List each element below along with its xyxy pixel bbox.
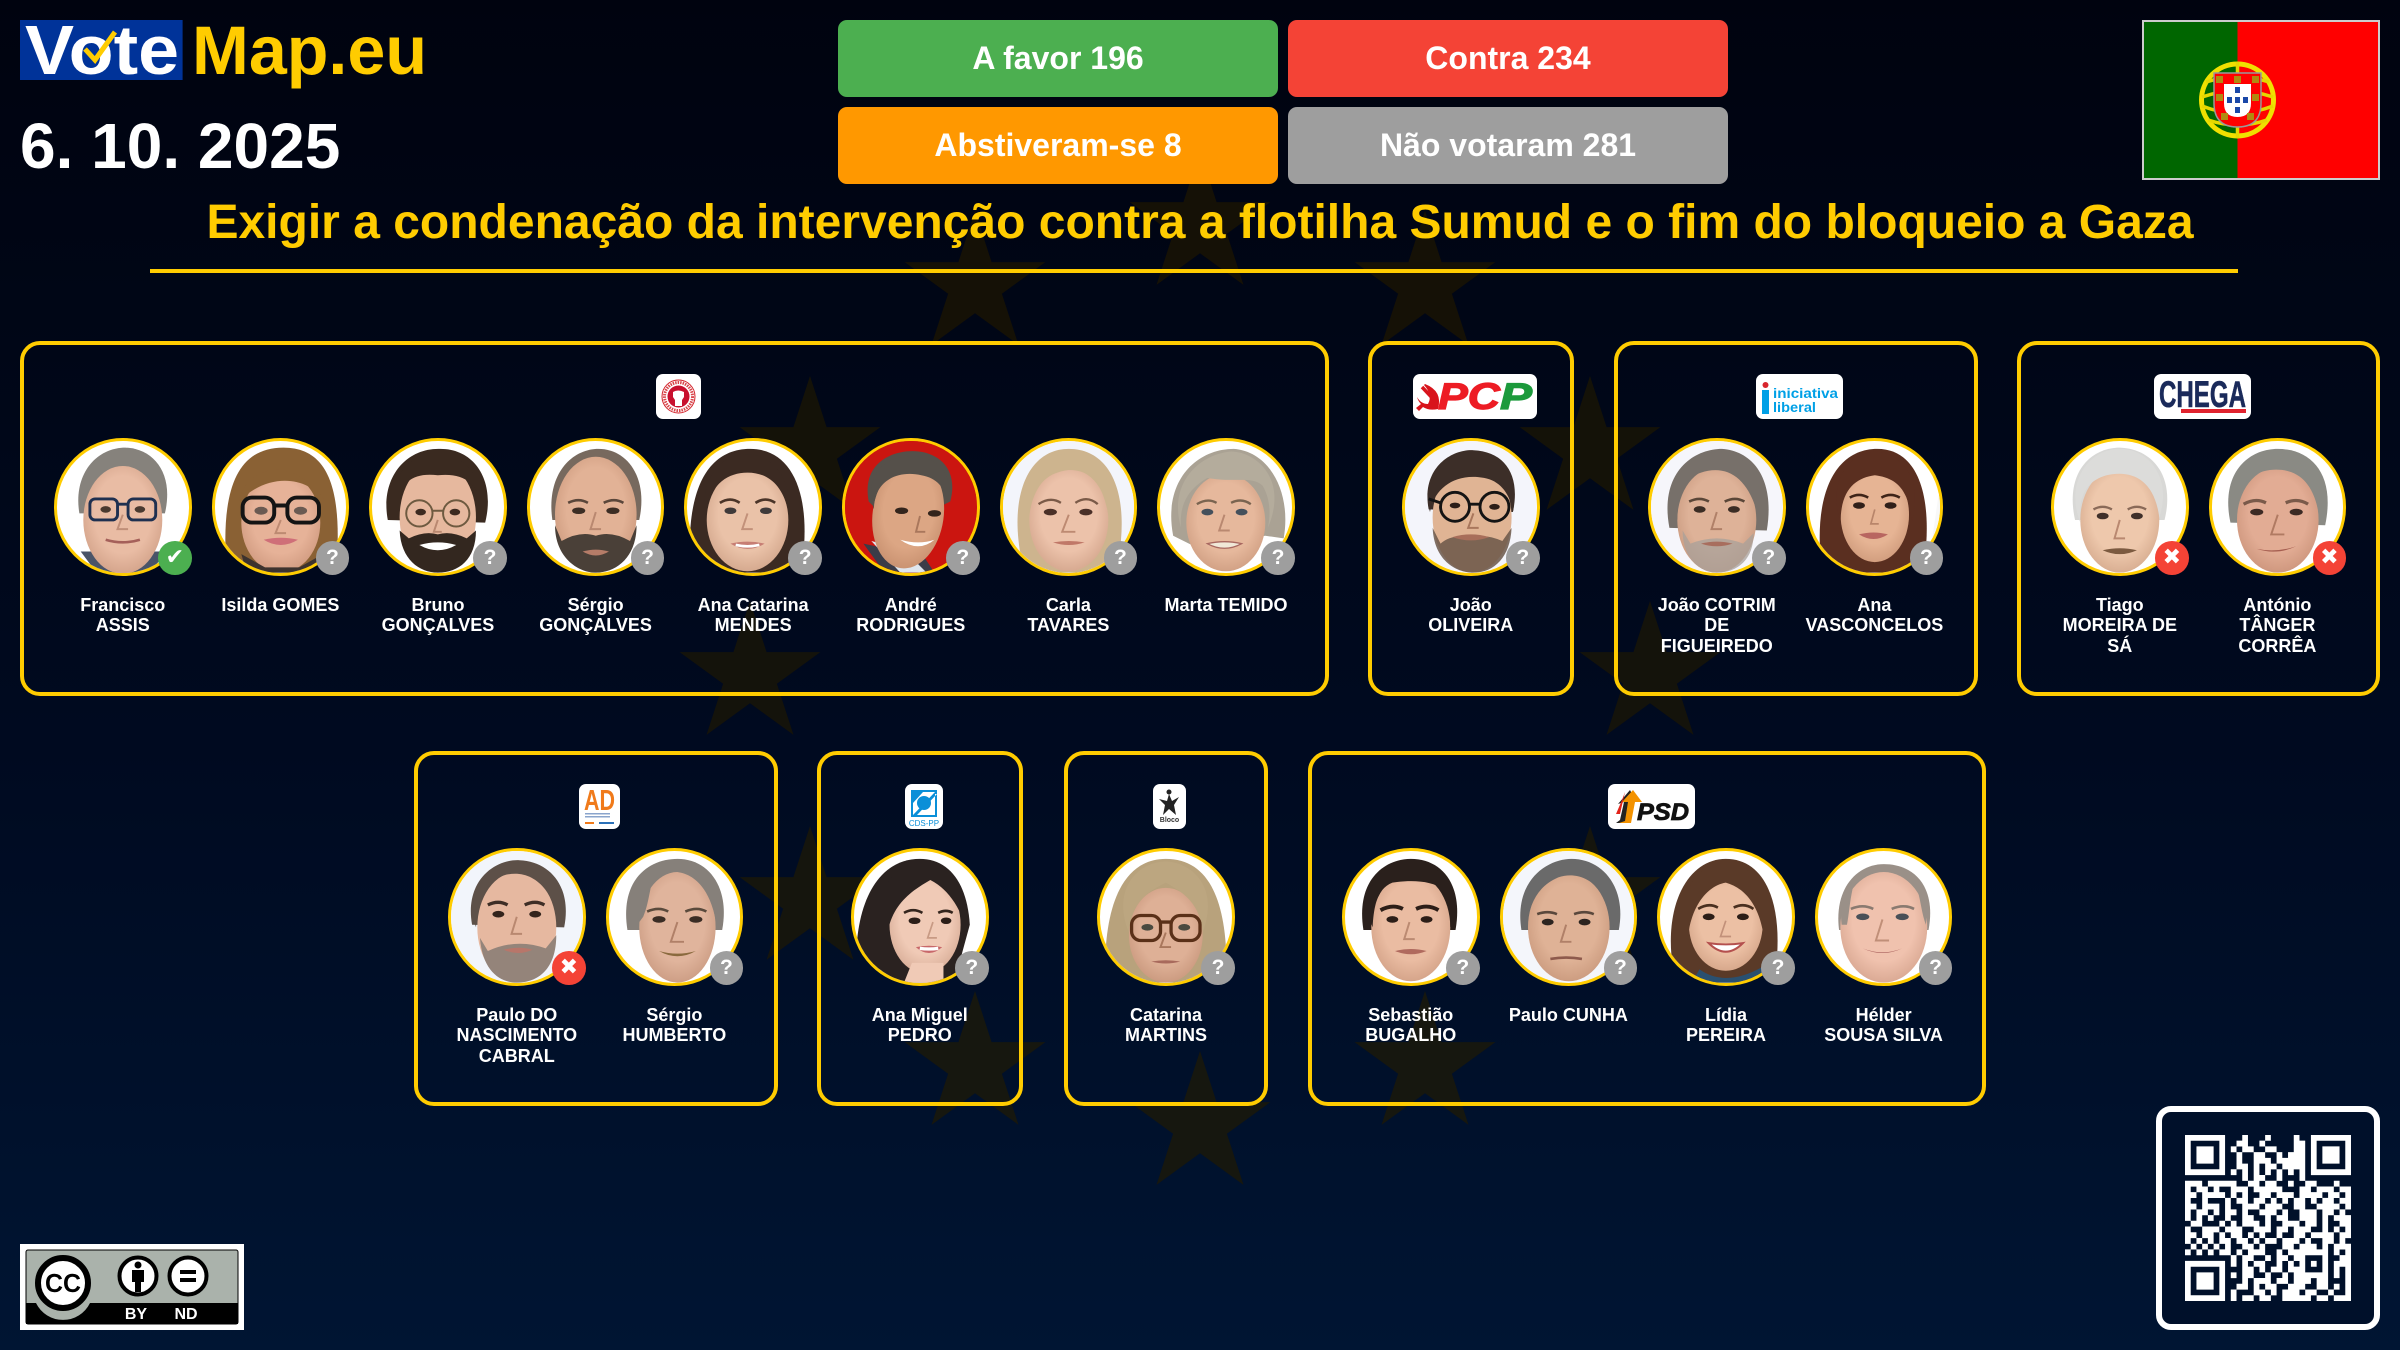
name: BUGALHO (1365, 1025, 1456, 1045)
name: MENDES (715, 615, 792, 635)
name: HUMBERTO (623, 1025, 726, 1045)
vote badge (1761, 951, 1795, 985)
name: GONÇALVES (539, 615, 652, 635)
panel: CDS-PP (817, 751, 1023, 1106)
name: Lídia (1705, 1004, 1747, 1024)
vote count: against: Contra 234 (1425, 40, 1591, 76)
vote badge: ? (720, 956, 733, 979)
party logo: Iniciativa Liberal (1756, 374, 1843, 419)
vote badge: ✖ (2163, 545, 2181, 570)
name: Ana (1857, 594, 1891, 614)
vote badge: ? (1772, 956, 1784, 979)
name (1027, 594, 1109, 635)
name: SÁ (2107, 636, 2132, 656)
portrait (54, 438, 192, 576)
card: Hélder Sousa Silva (1815, 848, 1952, 1045)
party logo: Iniciativa Liberal: iniciativa (1773, 385, 1838, 401)
name: Catarina (1130, 1004, 1202, 1024)
name: OLIVEIRA (1428, 615, 1513, 635)
card: João Oliveira (1402, 438, 1540, 635)
name (1125, 1004, 1207, 1045)
name (698, 594, 809, 635)
vote badge: ? (956, 546, 969, 569)
party logo: PS (656, 374, 701, 419)
license badge: CC BY-ND: CC (45, 1268, 81, 1298)
name: SOUSA SILVA (1824, 1025, 1943, 1045)
portrait (1342, 848, 1480, 986)
party logo: Iniciativa Liberal: liberal (1773, 399, 1816, 415)
name (1806, 594, 1943, 635)
card: Ana Catarina Mendes (684, 438, 822, 635)
vote badge: ? (1929, 956, 1942, 979)
name: CORRÊA (2238, 636, 2316, 656)
name: André (885, 594, 937, 614)
name: Sérgio (646, 1004, 702, 1024)
vote badge (316, 541, 349, 575)
name: DE (1704, 615, 1729, 635)
card: Paulo Cunha (1500, 848, 1637, 1024)
name: PEDRO (888, 1025, 952, 1045)
name (872, 1004, 968, 1045)
name (1658, 594, 1776, 656)
vote badge: ✖ (560, 955, 578, 980)
vote badge: ? (1516, 546, 1529, 569)
portrait (2209, 438, 2346, 576)
vote badge: ? (1456, 956, 1469, 979)
card: Catarina Martins (1097, 848, 1235, 1045)
name: Bruno (411, 594, 464, 614)
name (382, 594, 494, 635)
vote badge (2313, 541, 2346, 575)
vote count: in favour (838, 20, 1278, 97)
card: Sérgio Gonçalves (527, 438, 664, 635)
card: Bruno Gonçalves (369, 438, 507, 635)
name: TÂNGER (2239, 615, 2315, 635)
portrait (212, 438, 349, 576)
vote badge (946, 541, 980, 575)
vote badge: ? (1762, 546, 1775, 569)
name (1365, 1004, 1456, 1045)
panel: Iniciativa Liberal (1614, 341, 1978, 696)
party logo: CDS-PP (905, 784, 943, 829)
party logo: Bloco de Esquerda (1153, 784, 1186, 829)
card: Isilda Gomes (212, 438, 349, 614)
vote badge (1752, 541, 1786, 575)
name: Francisco (80, 594, 165, 614)
name: RODRIGUES (856, 615, 965, 635)
card: Ana Miguel Pedro (851, 848, 989, 1045)
vote badge (710, 951, 743, 985)
vote badge (473, 541, 507, 575)
portrait (1815, 848, 1952, 986)
vote count: abstained (838, 107, 1278, 184)
party logo: Bloco de Esquerda: Bloco (1160, 817, 1179, 824)
logo: VoteMap.eu (20, 20, 427, 89)
vote badge (158, 541, 192, 575)
vote badge: ? (641, 546, 654, 569)
vote badge: ? (326, 546, 339, 569)
QR code (2156, 1106, 2380, 1330)
name (456, 1004, 577, 1066)
name: Carla (1046, 594, 1091, 614)
flag: Portugal (2142, 20, 2380, 180)
panel: Bloco de Esquerda (1064, 751, 1268, 1106)
card: Sérgio Humberto (606, 848, 743, 1045)
name (856, 594, 965, 635)
name: Ana Miguel (872, 1004, 968, 1024)
portrait (527, 438, 664, 576)
vote badge (1104, 541, 1137, 575)
party logo: AD (579, 784, 620, 829)
name: Hélder (1856, 1004, 1912, 1024)
name: António (2243, 594, 2311, 614)
vote badge: ✔ (166, 545, 184, 570)
vote count: against (1288, 20, 1728, 97)
panel: PCP (1368, 341, 1574, 696)
vote count: in favour: A favor 196 (972, 40, 1144, 76)
panel: PSD (1308, 751, 1986, 1106)
card: João Cotrim de Figueiredo (1648, 438, 1786, 656)
name (80, 594, 165, 635)
name: Isilda GOMES (221, 594, 339, 614)
vote count: did not vote: Não votaram 281 (1380, 127, 1636, 163)
vote badge (1506, 541, 1540, 575)
card: Tiago Moreira de Sá (2051, 438, 2189, 656)
party logo: CDS-PP: CDS-PP (909, 819, 939, 828)
name (1805, 1004, 1962, 1046)
card: Marta Temido (1157, 438, 1295, 614)
name: Sérgio (568, 594, 624, 614)
license badge: CC BY-ND: BY (125, 1306, 147, 1323)
vote badge: ? (1114, 546, 1127, 569)
card: Sebastião Bugalho (1342, 848, 1480, 1045)
portrait (1402, 438, 1540, 576)
card: Paulo do Nascimento Cabral (448, 848, 586, 1066)
license badge: CC BY-ND: ND (174, 1306, 198, 1323)
portrait (448, 848, 586, 986)
card: Lídia Pereira (1657, 848, 1795, 1045)
portrait (369, 438, 507, 576)
name (2063, 594, 2177, 656)
name: FIGUEIREDO (1661, 636, 1773, 656)
name (539, 594, 652, 635)
portrait (842, 438, 980, 576)
card: Ana Vasconcelos (1806, 438, 1943, 635)
portrait (1657, 848, 1795, 986)
name: VASCONCELOS (1806, 615, 1943, 635)
vote badge: ? (1920, 546, 1933, 569)
vote badge (552, 951, 586, 985)
name: TAVARES (1027, 615, 1109, 635)
name: ASSIS (96, 615, 150, 635)
portrait (606, 848, 743, 986)
card: Carla Tavares (1000, 438, 1137, 635)
vote badge (1910, 541, 1943, 575)
vote badge (631, 541, 664, 575)
card: António Tânger Corrêa (2209, 438, 2346, 656)
portrait (2051, 438, 2189, 576)
vote badge: ? (965, 956, 978, 979)
panel: Chega (2017, 341, 2380, 696)
name: João (1450, 594, 1492, 614)
portrait (851, 848, 989, 986)
portrait (1500, 848, 1637, 986)
vote badge: ? (1212, 956, 1224, 979)
vote badge (1261, 541, 1295, 575)
vote badge: ✖ (2320, 545, 2339, 570)
name (1428, 594, 1513, 635)
name: Sebastião (1368, 1004, 1453, 1024)
title underline (150, 269, 2238, 273)
portrait (1648, 438, 1786, 576)
vote badge (788, 541, 822, 575)
panel: PS (20, 341, 1329, 696)
name (623, 1004, 726, 1045)
license badge: CC BY-ND (20, 1244, 244, 1330)
card: Francisco Assis (54, 438, 192, 635)
name: João COTRIM (1658, 594, 1776, 614)
name (1686, 1004, 1766, 1045)
name: Paulo CUNHA (1509, 1004, 1628, 1024)
panel: AD (414, 751, 778, 1106)
name: Ana Catarina (698, 594, 809, 614)
name: MOREIRA DE (2063, 615, 2177, 635)
vote count: abstained: Abstiveram-se 8 (934, 127, 1182, 163)
party logo: PCP (1413, 374, 1537, 419)
title: Exigir a condenação da intervenção contra a flotilha Sumud e o fim do bloqueio a Gaza (206, 196, 2194, 249)
name: Paulo DO (476, 1004, 557, 1024)
name: NASCIMENTO (456, 1025, 577, 1045)
party logo: PCP: P (1500, 376, 1532, 417)
portrait (1157, 438, 1295, 576)
date: 6. 10. 2025 (20, 110, 340, 182)
name: CABRAL (479, 1046, 555, 1066)
portrait (684, 438, 822, 576)
vote badge (1201, 951, 1235, 985)
vote count: did not vote (1288, 107, 1728, 184)
card: André Rodrigues (842, 438, 980, 635)
vote badge (2155, 541, 2189, 575)
name: MARTINS (1125, 1025, 1207, 1045)
vote badge: ? (1614, 956, 1627, 979)
portrait (1806, 438, 1943, 576)
party logo: PSD (1608, 784, 1695, 829)
vote badge (1604, 951, 1637, 985)
name: GONÇALVES (382, 615, 494, 635)
name (2238, 594, 2316, 656)
vote badge: ? (799, 546, 812, 569)
vote badge (955, 951, 989, 985)
vote badge (1919, 951, 1952, 985)
party logo: PCP: PC (1438, 376, 1502, 417)
name: Tiago (2096, 594, 2144, 614)
portrait (1097, 848, 1235, 986)
party logo: PSD: PSD (1637, 799, 1689, 826)
name: PEREIRA (1686, 1025, 1766, 1045)
vote badge (1446, 951, 1480, 985)
portrait (1000, 438, 1137, 576)
vote badge: ? (1272, 546, 1284, 569)
vote badge: ? (484, 546, 496, 569)
name: Marta TEMIDO (1164, 594, 1287, 614)
